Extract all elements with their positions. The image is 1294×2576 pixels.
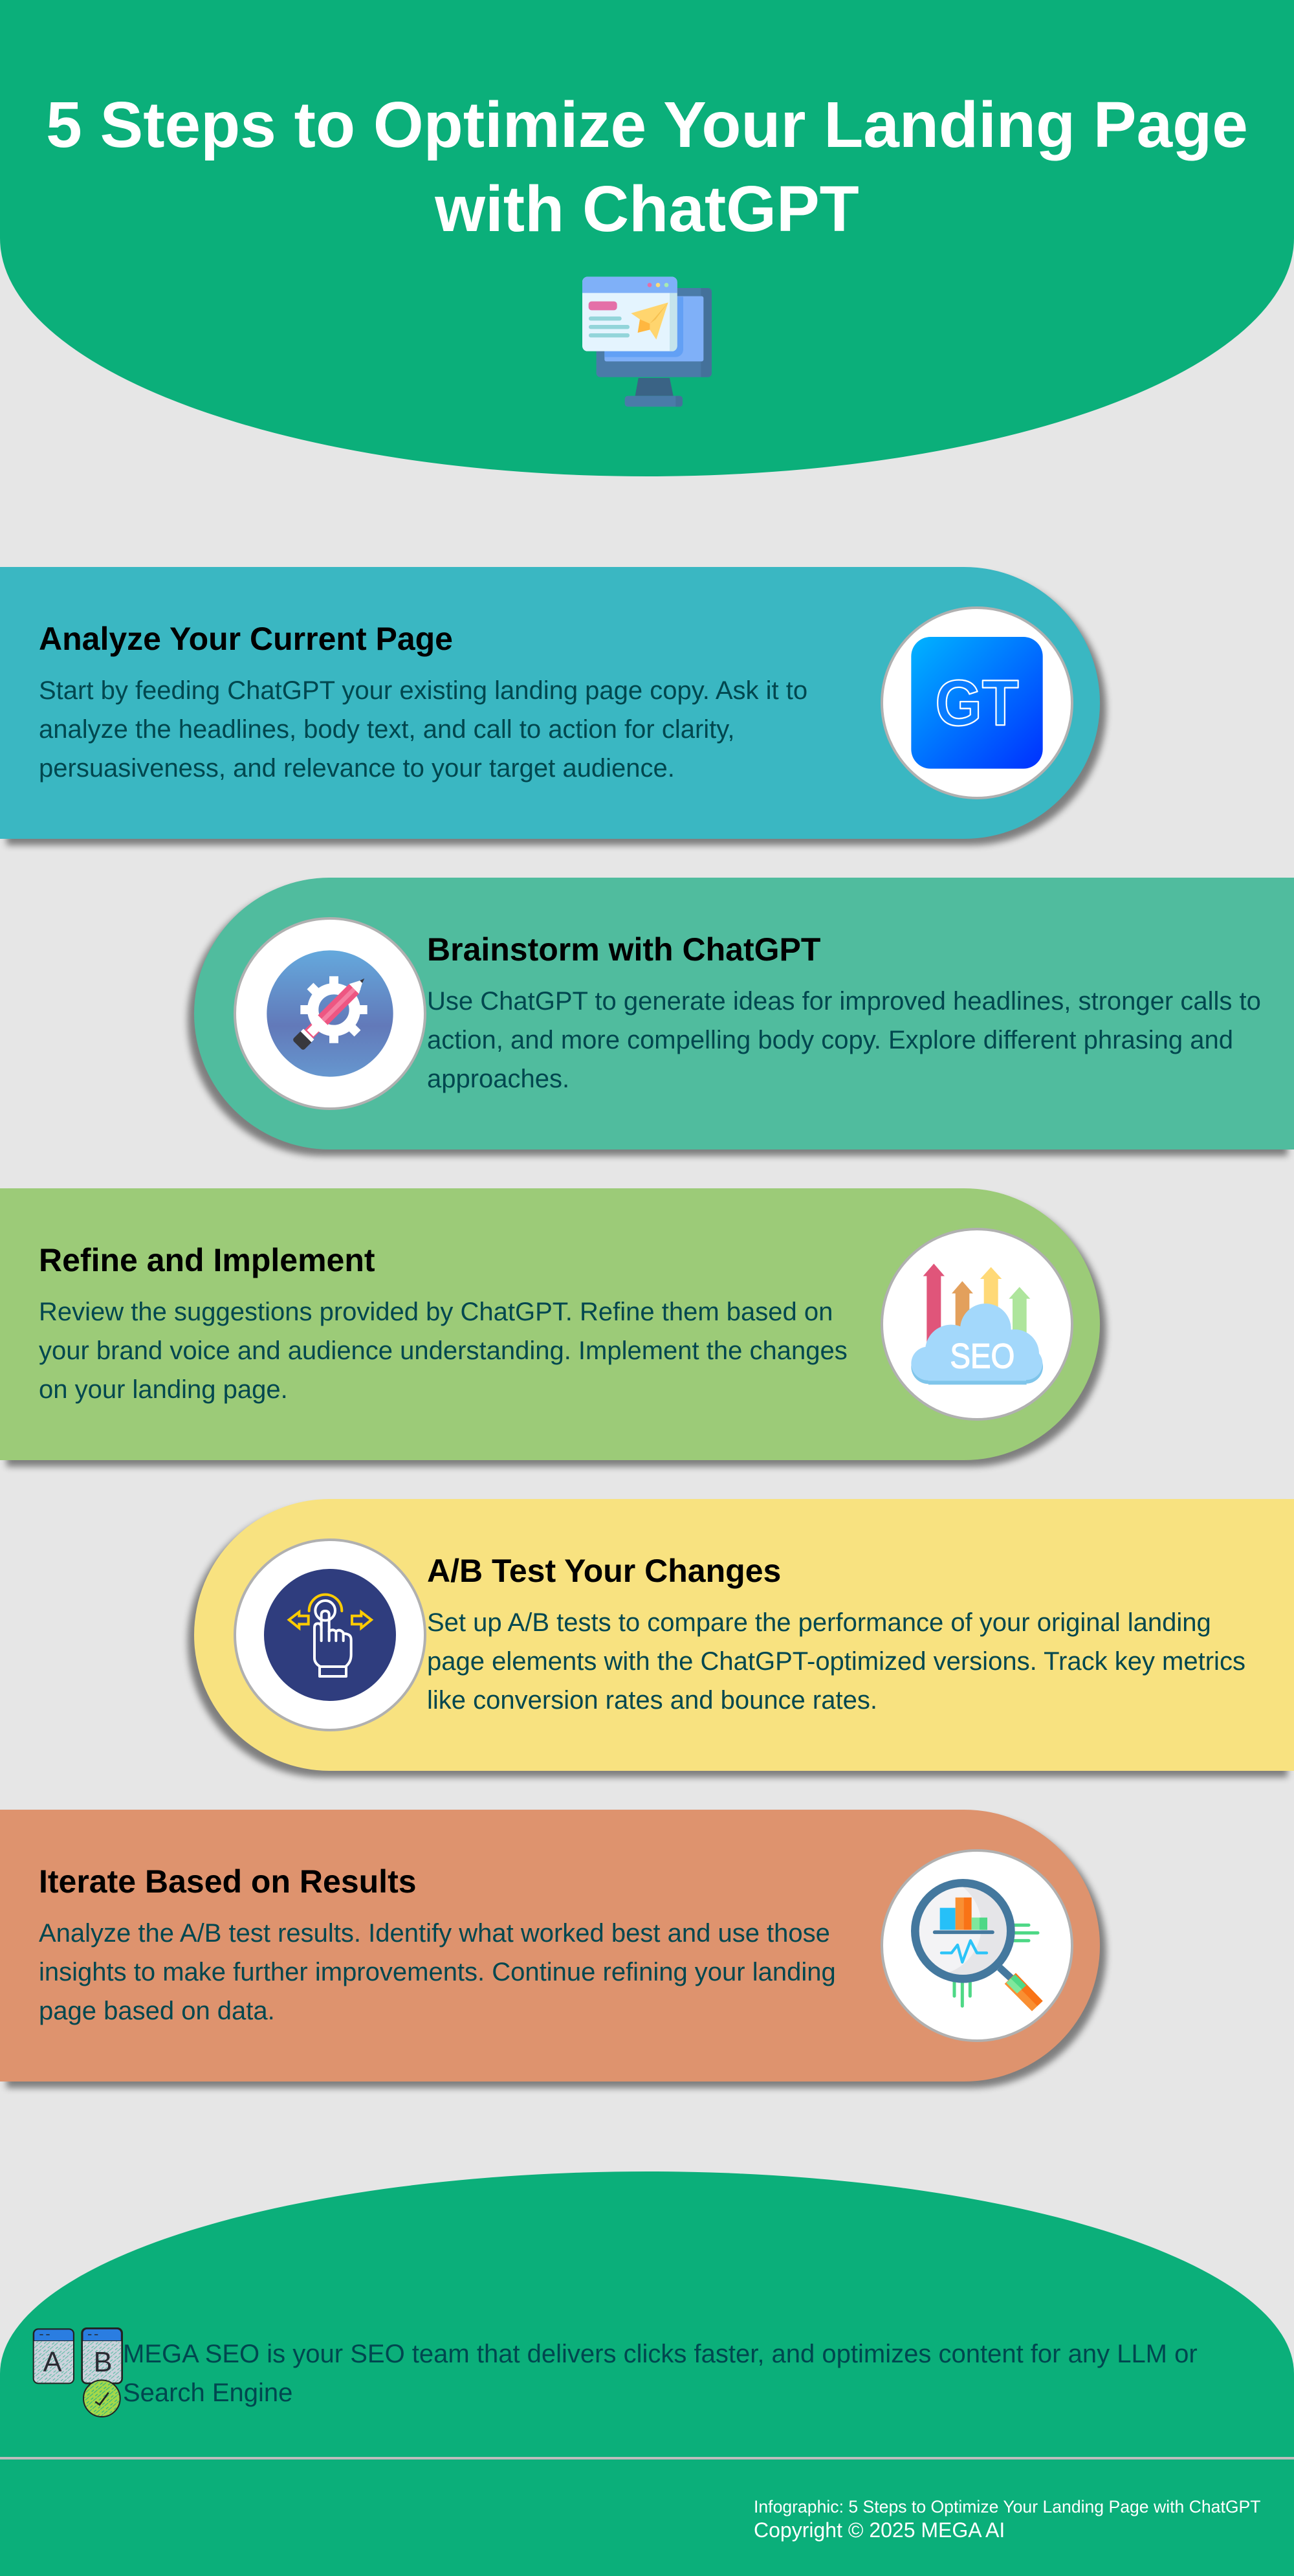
header banner [0,0,1294,476]
icon: SEO cloud with arrows [881,1228,1073,1421]
panel: step 1 analyze [0,567,1100,839]
heading: step 2: Brainstorm with ChatGPT [427,931,820,968]
text: step 1: Start by feeding ChatGPT your existing landing page copy. Ask it to [39,676,807,705]
title: 5 Steps to Optimize Your Landing Page [46,89,1248,161]
text: step 4 [427,1608,1245,1715]
icon: monitor with browser window and paper plane [582,277,712,406]
icon: A/B test windows with check [32,2327,123,2417]
text: step 1: analyze the headlines, body text, and call to action for clarity, [39,715,734,744]
panel: step 4 A/B test [194,1499,1294,1771]
text: step 3: Review the suggestions provided by ChatGPT. Refine them based on [39,1298,833,1326]
text: step 4: page elements with the ChatGPT-optimized versions. Track key metrics [427,1647,1245,1676]
text: footer description: MEGA SEO is your SEO team that delivers clicks faster, and optimizes content for any LLM or [123,2340,1198,2368]
icon text: A: A [43,2347,62,2378]
text: step 4: Set up A/B tests to compare the performance of your original landing [427,1608,1211,1637]
text: source and copyright: Infographic: 5 Steps to Optimize Your Landing Page with ChatGPT [754,2497,1261,2516]
text: source and copyright [754,2497,1261,2542]
panel: step 2 brainstorm [194,878,1294,1149]
heading: step 1: Analyze Your Current Page [39,621,453,657]
text: step 5: insights to make further improvements. Continue refining your landing [39,1958,836,1986]
text: step 5: page based on data. [39,1997,275,2025]
panel: step 3 refine [0,1188,1100,1460]
text: source and copyright: Copyright © 2025 MEGA AI [754,2518,1005,2542]
text: step 5: Analyze the A/B test results. Identify what worked best and use those [39,1919,830,1948]
text: footer description [123,2340,1198,2407]
text: step 3: your brand voice and audience understanding. Implement the changes [39,1337,848,1365]
heading: step 3: Refine and Implement [39,1242,375,1278]
footer band [0,2171,1294,2576]
divider line [0,2457,1294,2459]
icon: GT app badge [881,606,1073,799]
title [46,89,1248,245]
text: step 1: persuasiveness, and relevance to your target audience. [39,754,675,783]
icon text: B: B [94,2347,113,2378]
icon: tap and swipe hand [234,1538,426,1731]
text: step 4: like conversion rates and bounce rates. [427,1686,877,1715]
text: step 2 [427,987,1261,1093]
text: step 3: on your landing page. [39,1375,288,1404]
text: footer description: Search Engine [123,2379,292,2407]
icon: magnifier over charts [881,1849,1073,2042]
icon: GT app badge: GT [935,667,1019,740]
text: step 3 [39,1298,848,1404]
heading: step 5: Iterate Based on Results [39,1863,417,1900]
text: step 1 [39,676,807,783]
title: with ChatGPT [435,173,859,245]
text: step 2: action, and more compelling body copy. Explore different phrasing and [427,1026,1233,1054]
text: step 2: Use ChatGPT to generate ideas for improved headlines, stronger calls to [427,987,1261,1016]
panel: step 5 iterate [0,1810,1100,2082]
icon text: SEO: SEO [950,1337,1014,1375]
icon: gear and pencil [234,917,426,1110]
text: step 2: approaches. [427,1065,569,1093]
heading: step 4: A/B Test Your Changes [427,1553,781,1589]
text: step 5 [39,1919,836,2025]
